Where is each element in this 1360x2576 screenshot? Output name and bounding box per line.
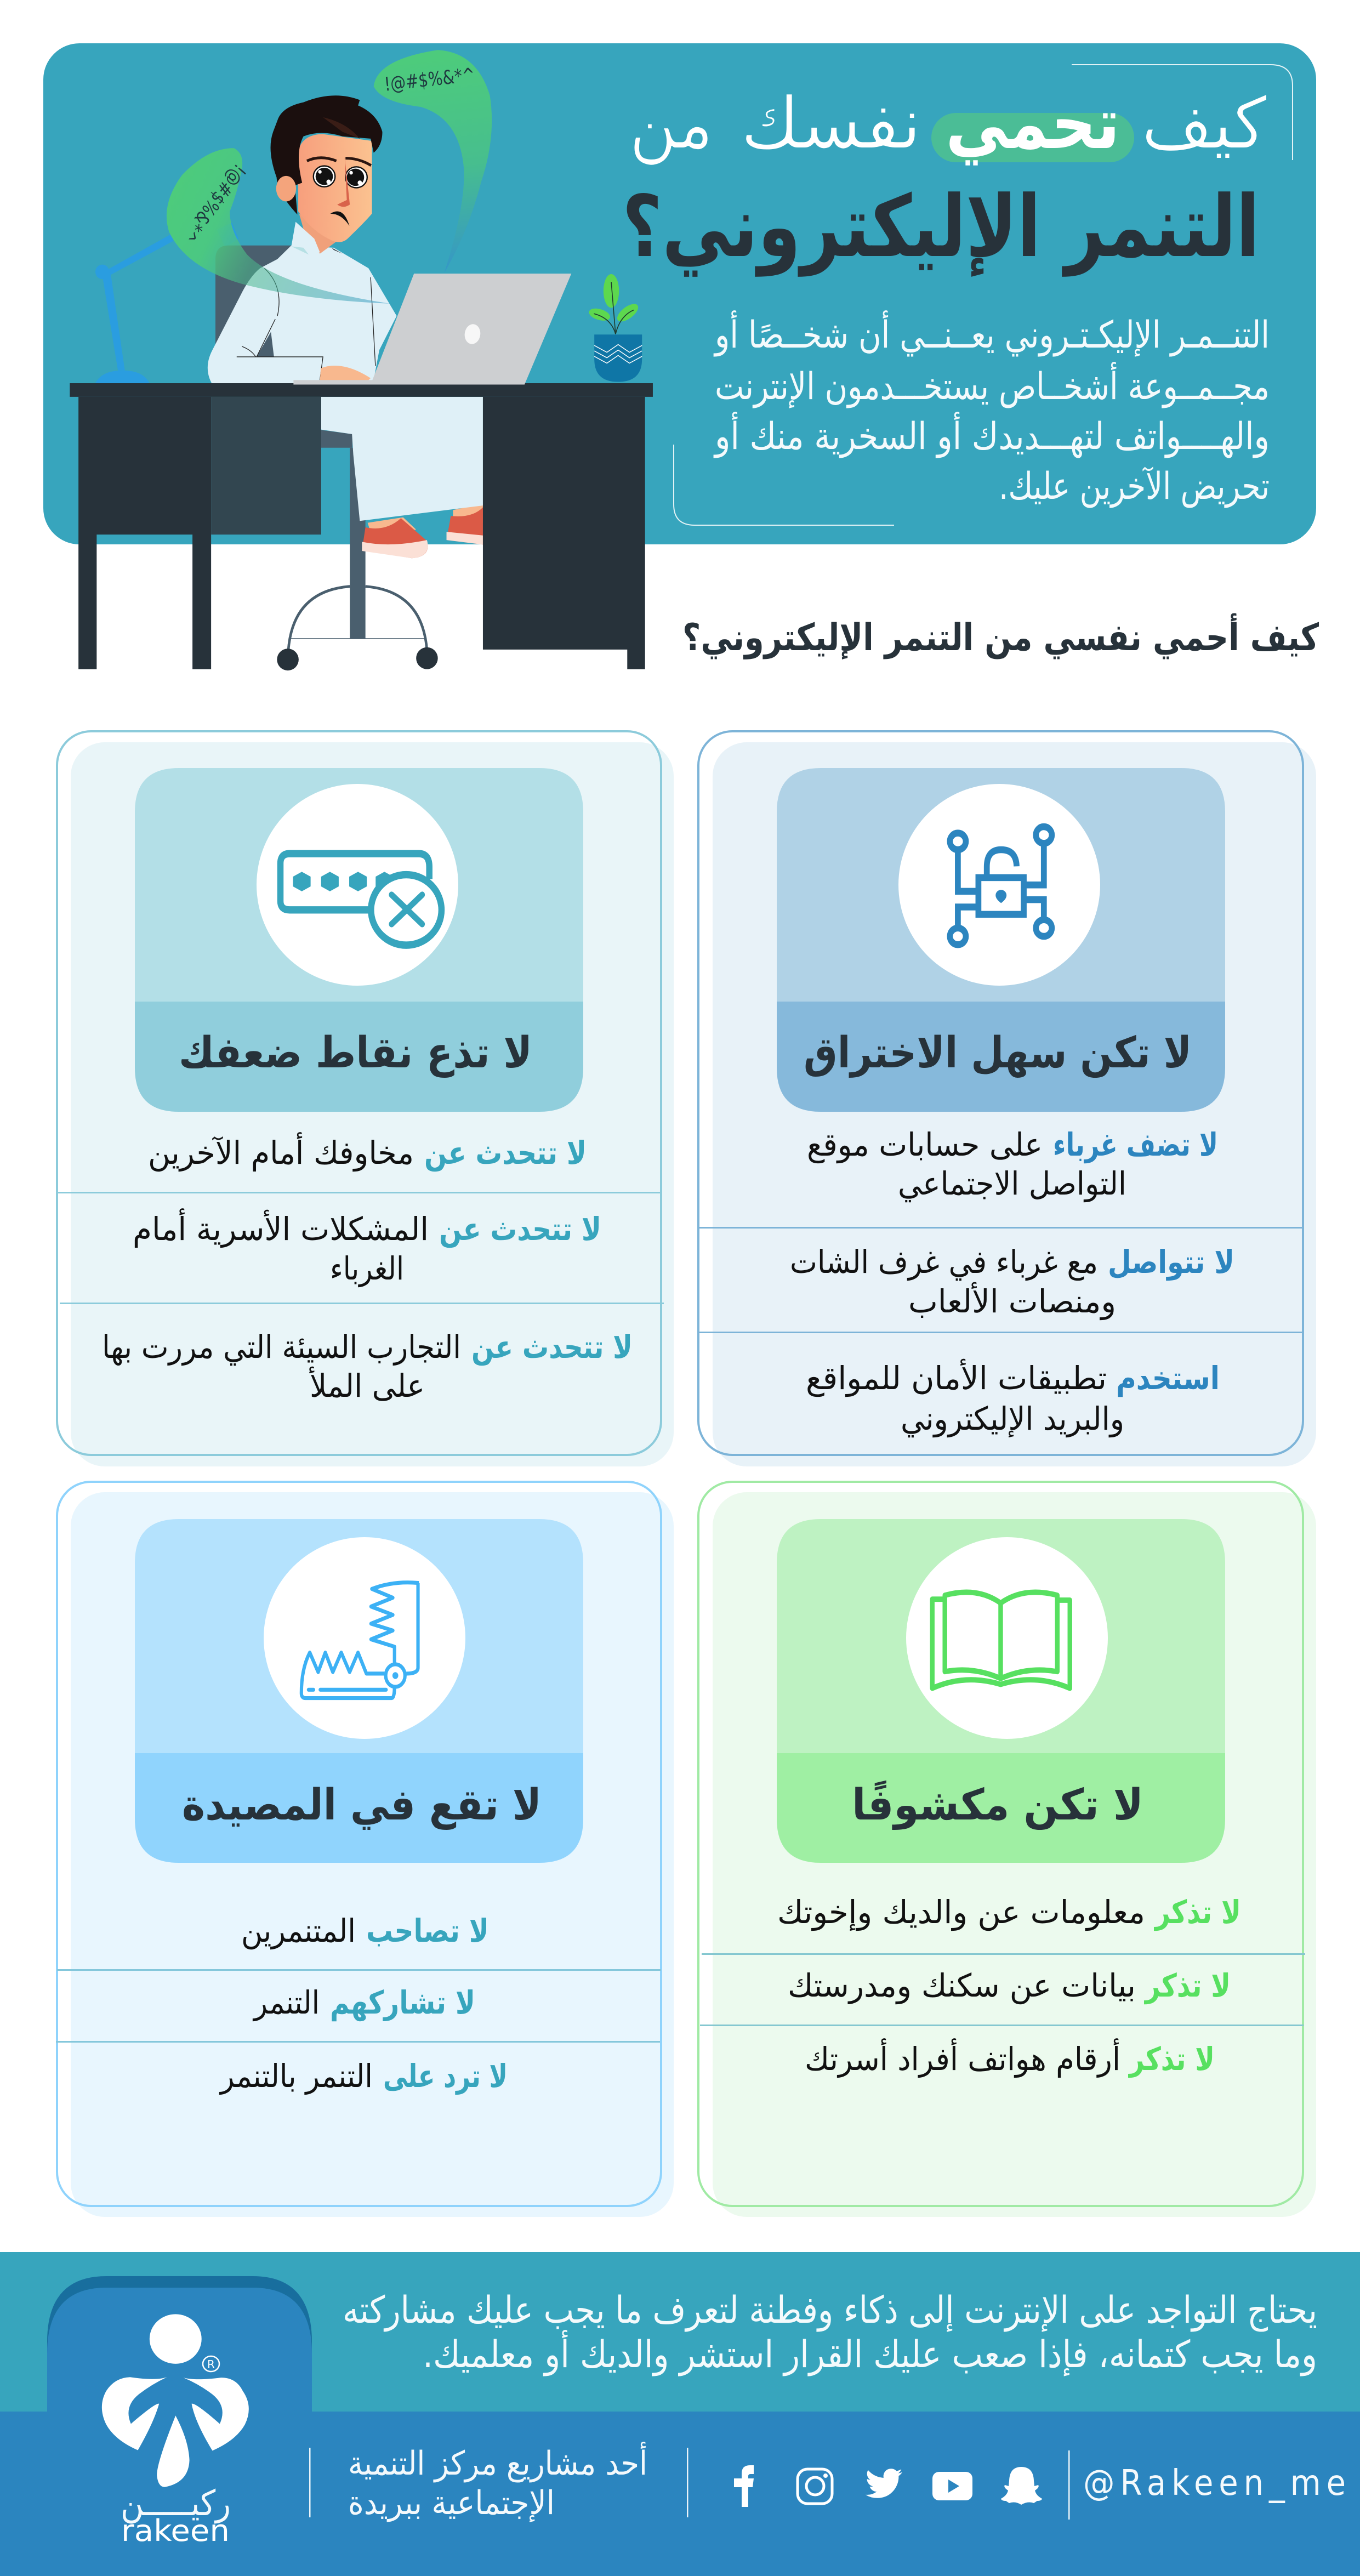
icon: open book <box>932 1592 1070 1688</box>
item list: لا تتحدث عن <box>471 1328 633 1366</box>
item list: لا ترد على <box>383 2057 508 2095</box>
item list: ومنصات الألعاب <box>908 1282 1116 1321</box>
item list: المشكلات الأسرية أمام <box>133 1208 429 1248</box>
card heading: لا تقع في المصيدة <box>182 1781 542 1830</box>
icon: snapchat <box>1001 2467 1042 2505</box>
illustration: boy at desk <box>70 50 653 670</box>
card heading: لا تذع نقاط ضعفك <box>179 1028 532 1078</box>
card header <box>135 768 583 1112</box>
item list: الغرباء <box>330 1250 404 1288</box>
item list: لا تشاركهم <box>330 1984 475 2022</box>
item list <box>57 1132 664 1404</box>
eyebrows <box>307 158 371 166</box>
boy character <box>208 95 483 558</box>
icon: facebook <box>734 2465 754 2507</box>
card header <box>777 768 1225 1112</box>
logo mark <box>102 2314 249 2487</box>
card heading: لا تكن سهل الاختراق <box>804 1028 1192 1078</box>
intro paragraph: تحريض الآخرين عليك.‏ <box>999 465 1270 508</box>
title line one: تحمي <box>946 82 1120 166</box>
project credit <box>348 2442 647 2522</box>
face <box>298 134 372 242</box>
item list: لا تذكر <box>1144 1967 1231 2005</box>
header panel <box>43 43 1316 544</box>
social handle: @Rakeen_me <box>1083 2463 1346 2504</box>
item list <box>56 1912 661 2095</box>
item list: لا تذكر <box>1128 2040 1215 2078</box>
header corner bracket top right <box>1072 65 1293 160</box>
icon: twitter <box>866 2469 902 2498</box>
item list: التجارب السيئة التي مررت بها <box>102 1328 461 1366</box>
neck and collar <box>291 214 343 254</box>
nose <box>337 157 350 207</box>
speech bubble right <box>374 50 492 273</box>
legs and shoes <box>321 397 483 558</box>
speech bubble right: !@#$%&*^ <box>383 64 476 96</box>
intro paragraph <box>713 310 1270 508</box>
icon: digital lock <box>950 827 1052 945</box>
hair <box>271 95 382 214</box>
project credit: الإجتماعية ببريدة <box>348 2484 555 2522</box>
laptop <box>293 274 571 385</box>
item list: لا تتحدث عن <box>439 1210 601 1248</box>
title line one: من <box>629 82 713 166</box>
item list: معلومات عن والديك وإخوتك <box>777 1893 1145 1931</box>
item list: التنمر بالتنمر <box>219 2057 373 2095</box>
icon: password blocked <box>281 854 441 945</box>
icon: potted plant <box>588 274 642 382</box>
card header <box>777 1519 1225 1863</box>
item list: مع غرباء في غرف الشات <box>790 1243 1098 1281</box>
project credit: أحد مشاريع مركز التنمية <box>348 2442 647 2483</box>
item list: على حسابات موقع <box>807 1126 1043 1164</box>
item list: المتنمرين <box>241 1912 356 1950</box>
panel: do not be exposed <box>698 1482 1316 2217</box>
footer advice text <box>343 2289 1317 2376</box>
logo Arabic wordmark: ركيـــــن <box>121 2483 231 2524</box>
speech bubble left <box>167 148 390 304</box>
desk <box>70 383 653 669</box>
registered mark: R <box>207 2358 215 2371</box>
title line one: نفسك <box>741 82 921 165</box>
item list: لا تتواصل <box>1108 1243 1234 1281</box>
item list: تطبيقات الأمان للمواقع <box>806 1358 1107 1397</box>
item list: أرقام هواتف أفراد أسرتك <box>805 2038 1120 2078</box>
item list: مخاوفك أمام الآخرين <box>148 1132 414 1172</box>
footer info band <box>0 2412 1360 2576</box>
title line one: كيف <box>1141 82 1267 165</box>
icon: trap <box>301 1583 419 1698</box>
item list: التنمر <box>252 1984 320 2022</box>
intro paragraph: والهــــواتف لتهـــديدك أو السخرية منك أو <box>713 412 1270 458</box>
thobe torso <box>208 246 397 385</box>
item list: لا تتحدث عن <box>424 1134 587 1172</box>
icon: desk lamp <box>95 223 238 383</box>
registered mark <box>203 2356 219 2372</box>
item list <box>700 1893 1305 2078</box>
logo tab <box>47 2276 312 2561</box>
item list: على الملأ <box>309 1366 425 1404</box>
item list: استخدم <box>1116 1360 1220 1397</box>
icon: youtube <box>932 2472 972 2500</box>
header corner bracket bottom left <box>674 445 894 525</box>
ear <box>276 176 296 201</box>
item list <box>698 1126 1303 1438</box>
item list: لا تضف غرباء <box>1053 1126 1218 1164</box>
panel: do not fall into the trap <box>56 1482 674 2217</box>
card header <box>135 1519 583 1863</box>
office chair <box>215 246 438 670</box>
footer <box>0 2252 1360 2576</box>
item list: لا تذكر <box>1154 1893 1241 1931</box>
title highlight pill <box>931 113 1134 162</box>
eyes <box>314 166 367 187</box>
panel: do not leave weak points <box>57 731 674 1466</box>
card heading: لا تكن مكشوفًا <box>852 1780 1143 1830</box>
item list: التواصل الاجتماعي <box>898 1165 1126 1203</box>
speech bubble left: !@#$%&*^ <box>178 160 250 246</box>
logo Latin wordmark: rakeen <box>121 2514 230 2548</box>
panel: do not be easy to hack <box>698 731 1316 1466</box>
mouth <box>331 211 349 226</box>
title line one <box>629 82 1267 166</box>
footer advice band <box>0 2252 1360 2412</box>
icon: instagram <box>798 2469 832 2504</box>
item list: والبريد الإليكتروني <box>901 1400 1124 1438</box>
item list: لا تصاحب <box>366 1912 489 1949</box>
item list: بيانات عن سكنك ومدرستك <box>788 1967 1136 2005</box>
